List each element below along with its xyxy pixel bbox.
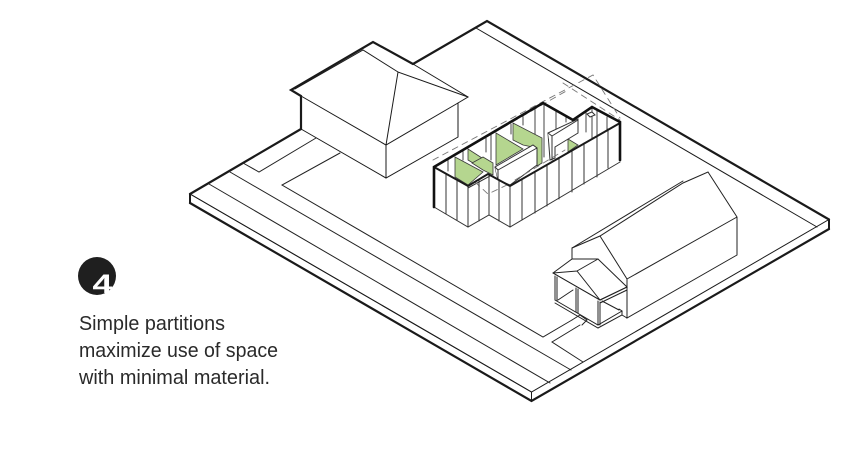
- thick wall outline: [434, 103, 620, 207]
- dashed roof outline: [433, 75, 620, 194]
- white partition blocks: [468, 112, 595, 188]
- prefab unit: floor and interior: [433, 75, 620, 227]
- exterior wall top edge: [434, 123, 620, 186]
- sidewalk and driveway lines: [209, 138, 583, 383]
- step number badge: 4: [92, 269, 112, 299]
- porch: [553, 259, 627, 328]
- caption text: maximize use of space: [79, 340, 278, 362]
- neighbouring house: hipped roof: [291, 42, 468, 178]
- caption text: with minimal material.: [78, 367, 270, 389]
- green partition walls: [455, 123, 578, 185]
- house with gable roof and porch: [553, 172, 737, 330]
- step number badge: [78, 257, 116, 299]
- site plan: ground slab: [190, 21, 829, 401]
- exterior cladding seams: [434, 129, 620, 227]
- interior wall lines: [448, 103, 607, 171]
- caption text: [78, 313, 278, 389]
- caption text: Simple partitions: [79, 313, 225, 335]
